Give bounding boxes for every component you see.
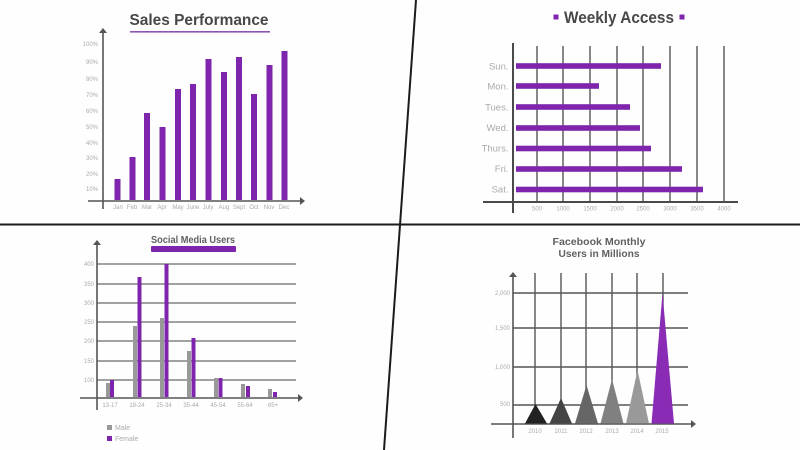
x axis labels: 2000 xyxy=(610,206,624,212)
x axis labels: 4000 xyxy=(717,206,731,212)
chart axes xyxy=(483,43,738,213)
heading: second line: Users in Millions xyxy=(558,248,640,260)
female bars xyxy=(110,264,277,397)
x axis labels: 18-24 xyxy=(129,403,145,409)
x axis labels: June xyxy=(186,205,200,211)
y axis labels: 20% xyxy=(86,172,99,178)
heading: social media users: Social Media Users xyxy=(151,235,235,246)
y axis labels: 50% xyxy=(86,125,99,131)
y axis labels: 150 xyxy=(84,359,95,365)
x axis labels: 1000 xyxy=(556,206,570,212)
panel: social media users xyxy=(80,235,303,443)
chart axes xyxy=(80,240,303,410)
day labels: Mon. xyxy=(487,82,508,92)
x axis labels xyxy=(528,429,669,435)
x axis labels: Jan xyxy=(113,205,123,211)
heading: facebook monthly users: Facebook Monthly xyxy=(552,236,646,248)
y axis labels: 100 xyxy=(84,378,95,384)
panel: sales performance xyxy=(83,12,305,211)
x axis labels xyxy=(113,205,289,211)
day labels: Tues. xyxy=(485,102,508,114)
x axis labels: 2015 xyxy=(655,429,669,435)
day labels xyxy=(482,62,508,196)
y axis labels: 40% xyxy=(86,141,99,147)
day labels: Sun. xyxy=(489,62,508,72)
chart grid lines xyxy=(537,46,724,202)
panel: weekly access xyxy=(482,9,738,213)
x axis labels: Oct xyxy=(249,205,259,211)
x axis labels: 35-44 xyxy=(183,403,199,409)
triangle bars xyxy=(525,293,674,424)
y axis labels: 1,500 xyxy=(495,326,511,332)
x axis labels: 2011 xyxy=(555,429,568,435)
x axis labels: 45-54 xyxy=(210,403,226,409)
x axis labels: July xyxy=(203,205,213,211)
chart axes xyxy=(88,28,305,209)
day labels: Thurs. xyxy=(482,144,508,154)
day labels: Fri. xyxy=(495,164,508,175)
x axis labels: Dec xyxy=(279,205,289,211)
bar chart: monthly bars xyxy=(114,51,288,200)
title underline xyxy=(130,31,270,33)
x axis labels: 3000 xyxy=(663,206,677,212)
day labels: Wed. xyxy=(486,123,508,134)
x axis labels xyxy=(102,403,279,409)
x axis labels: Sept xyxy=(233,205,246,211)
x axis labels: 2500 xyxy=(636,206,650,212)
x axis labels: 25-34 xyxy=(156,403,172,409)
legend: Female xyxy=(115,436,138,443)
x axis labels: 3500 xyxy=(690,206,704,212)
heading: weekly access: Weekly Access xyxy=(564,9,674,27)
chart axes xyxy=(491,272,696,438)
x axis labels: Mar xyxy=(142,205,152,211)
chart grid lines xyxy=(97,264,296,380)
panel: facebook monthly users xyxy=(491,236,696,438)
y axis labels: 100% xyxy=(83,42,99,48)
y axis labels xyxy=(84,262,95,384)
x axis labels: Feb xyxy=(127,205,138,211)
y axis labels: 10% xyxy=(86,187,99,193)
x axis labels: 55-64 xyxy=(237,403,253,409)
y axis labels: 200 xyxy=(84,339,95,345)
title bullet right xyxy=(680,14,684,20)
y axis labels xyxy=(495,291,511,408)
x axis labels: 2012 xyxy=(579,429,593,435)
x axis labels: 2013 xyxy=(605,429,619,435)
x axis labels: Aug xyxy=(219,205,229,211)
heading: sales performance: Sales Performance xyxy=(130,12,269,29)
legend: Male xyxy=(115,425,130,432)
y axis labels: 500 xyxy=(500,402,511,408)
y axis labels: 70% xyxy=(86,93,99,99)
title bullet left xyxy=(554,14,558,20)
x axis labels: 2010 xyxy=(528,429,542,435)
y axis labels: 90% xyxy=(86,60,99,66)
y axis labels: 2,000 xyxy=(495,291,511,297)
x axis labels: 500 xyxy=(532,206,543,212)
male bars xyxy=(106,318,272,397)
y axis labels: 60% xyxy=(86,109,99,115)
y axis labels: 30% xyxy=(86,156,99,162)
x axis labels: 2014 xyxy=(630,429,644,435)
x axis labels xyxy=(532,206,731,212)
y axis labels xyxy=(83,42,99,193)
x axis labels: Nov xyxy=(264,205,274,211)
x axis labels: 1500 xyxy=(583,206,597,212)
chart grid lines xyxy=(513,273,688,424)
x axis labels: Apr xyxy=(157,205,167,211)
title bar xyxy=(151,246,236,252)
y axis labels: 250 xyxy=(84,320,95,326)
x axis labels: 65+ xyxy=(268,403,279,409)
y axis labels: 350 xyxy=(84,282,95,288)
x axis labels: May xyxy=(172,205,184,211)
legend xyxy=(107,425,138,443)
y axis labels: 80% xyxy=(86,77,99,83)
horizontal bars xyxy=(516,63,703,192)
y axis labels: 1,000 xyxy=(495,365,511,371)
y axis labels: 300 xyxy=(84,301,95,307)
day labels: Sat. xyxy=(492,184,508,196)
y axis labels: 400 xyxy=(84,262,95,268)
x axis labels: 13-17 xyxy=(102,403,118,409)
